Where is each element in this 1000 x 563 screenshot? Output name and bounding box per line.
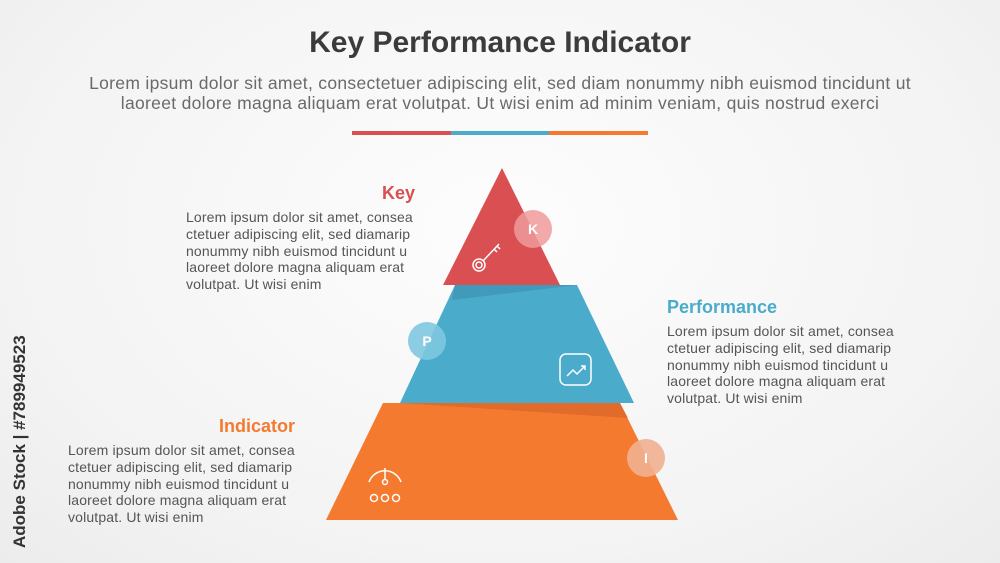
text block: key (186, 183, 415, 292)
circle I: I (644, 450, 648, 466)
color bar divider (352, 131, 648, 135)
layer: indicator (326, 403, 678, 520)
text block: indicator: Lorem ipsum dolor sit amet, consea (68, 442, 295, 458)
layer: key (443, 168, 560, 285)
text block: performance: nonummy nibh euismod tincidunt u (667, 357, 888, 373)
icon: gauge (369, 468, 401, 502)
text block: key: laoreet dolore magna aliquam erat (186, 259, 404, 275)
subtitle (89, 73, 911, 113)
text block: key: ctetuer adipiscing elit, sed diamarip (186, 226, 410, 242)
circle K (514, 210, 552, 248)
text block: key: Lorem ipsum dolor sit amet, consea (186, 209, 413, 225)
text block: indicator: volutpat. Ut wisi enim (68, 509, 204, 525)
text block: indicator (68, 416, 295, 525)
subtitle: Lorem ipsum dolor sit amet, consectetuer adipiscing elit, sed diam nonummy nibh euismod tincidunt ut (89, 73, 911, 93)
circle P (408, 322, 446, 360)
icon: chart (560, 354, 591, 385)
title: Key Performance Indicator (309, 26, 691, 59)
circle P: P (422, 333, 432, 349)
circle K: K (528, 221, 538, 237)
text block: indicator: Indicator (219, 416, 295, 436)
text block: performance: Performance (667, 297, 777, 317)
text block: indicator: laoreet dolore magna aliquam erat (68, 492, 286, 508)
layer: performance (400, 285, 634, 403)
text block: performance: ctetuer adipiscing elit, sed diamarip (667, 340, 891, 356)
text block: performance: volutpat. Ut wisi enim (667, 390, 803, 406)
icon: key (473, 244, 500, 271)
text block: indicator: ctetuer adipiscing elit, sed diamarip (68, 459, 292, 475)
text block: performance (667, 297, 894, 406)
text block: performance: laoreet dolore magna aliquam erat (667, 373, 885, 389)
text block: key: volutpat. Ut wisi enim (186, 276, 322, 292)
text block: key: Key (382, 183, 415, 203)
subtitle: laoreet dolore magna aliquam erat volutpat. Ut wisi enim ad minim veniam, quis nostrud exerci (121, 93, 879, 113)
circle I (627, 439, 665, 477)
side credit text: Adobe Stock | #789949523 (10, 335, 29, 548)
text block: key: nonummy nibh euismod tincidunt u (186, 243, 407, 259)
text block: indicator: nonummy nibh euismod tincidunt u (68, 476, 289, 492)
text block: performance: Lorem ipsum dolor sit amet, consea (667, 323, 894, 339)
